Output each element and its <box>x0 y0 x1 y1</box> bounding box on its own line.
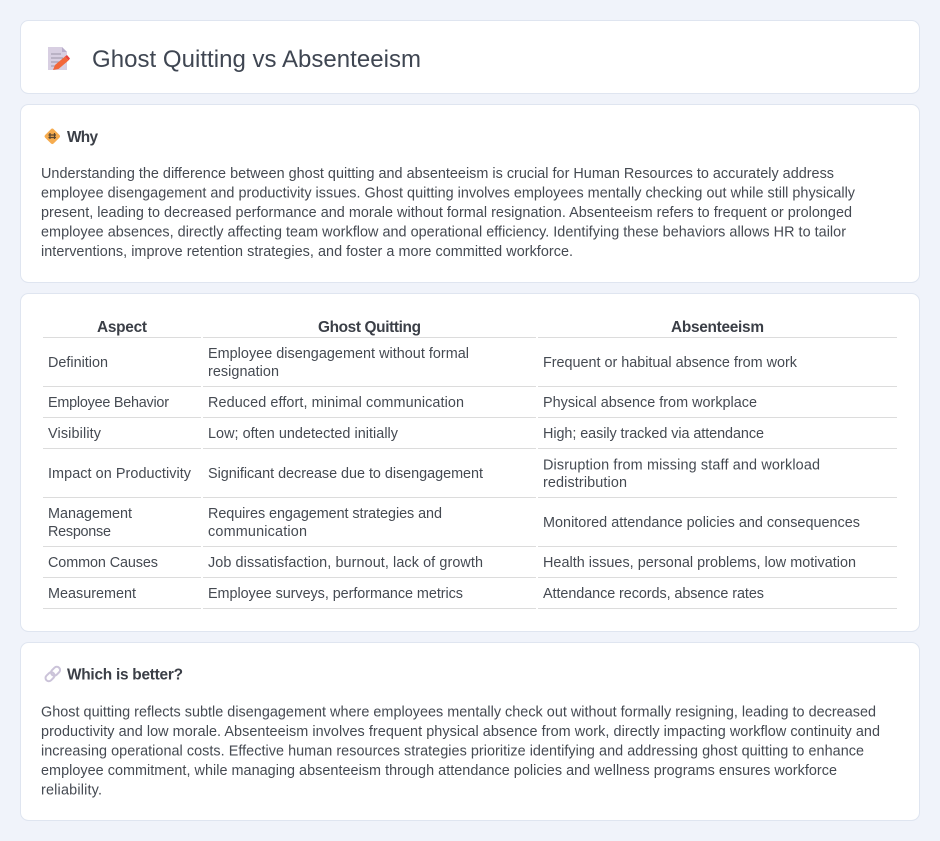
row: management response: Requires engagement strategies and <box>208 506 442 522</box>
row: measurement: Employee surveys, performance metrics <box>208 586 463 602</box>
row: measurement: Attendance records, absence rates <box>543 586 764 602</box>
row: visibility: High; easily tracked via attendance <box>543 426 764 442</box>
row: impact on productivity <box>43 458 897 498</box>
row: visibility: Low; often undetected initially <box>208 426 399 442</box>
row: definition: Frequent or habitual absence from work <box>543 355 798 371</box>
row: employee behavior <box>43 395 897 418</box>
row: common causes: Common Causes <box>48 555 158 571</box>
row: management response: Monitored attendance policies and consequences <box>543 515 860 531</box>
row: measurement: Measurement <box>48 586 136 602</box>
panel: comparison table <box>20 294 920 632</box>
icon: link <box>44 665 61 683</box>
panel: why <box>20 104 920 282</box>
panel: which is better <box>20 642 920 820</box>
table header row: Absenteeism <box>671 319 764 336</box>
row: definition: resignation <box>208 364 279 380</box>
row: impact on productivity: Impact on Productivity <box>48 466 192 482</box>
title: Ghost Quitting vs Absenteeism <box>92 46 421 73</box>
table header row <box>43 319 897 338</box>
row: definition <box>43 346 897 387</box>
text block: why paragraph: interventions, improve retention strategies, and foster a more committed workforce. <box>41 244 573 260</box>
row: common causes: Health issues, personal problems, low motivation <box>543 555 856 571</box>
text block: which is better paragraph: reliability. <box>41 783 102 799</box>
row: impact on productivity: redistribution <box>543 475 627 491</box>
text block: why paragraph: present, leading to decreased performance and morale without formal resignation. Absenteeism refers to frequent or prolonged <box>41 205 852 221</box>
row: impact on productivity: Significant decrease due to disengagement <box>208 466 483 482</box>
row: impact on productivity: Disruption from missing staff and workload <box>543 458 820 474</box>
table header row: Ghost Quitting <box>318 319 421 336</box>
text block: why paragraph: employee disengagement and productivity issues. Ghost quitting involves employees mentally checking out while still physically <box>41 186 856 202</box>
row: employee behavior: Physical absence from workplace <box>543 395 757 411</box>
panel: header <box>20 20 920 94</box>
row: management response: Response <box>48 524 111 540</box>
heading: why: Why <box>67 129 98 146</box>
row: common causes: Job dissatisfaction, burnout, lack of growth <box>208 555 483 571</box>
icon: warning diamond <box>44 128 61 145</box>
text block: why paragraph: Understanding the difference between ghost quitting and absenteeism is crucial for Human Resources to accurately address <box>41 166 834 182</box>
row: visibility <box>43 426 897 449</box>
row: management response <box>43 506 897 547</box>
row: common causes <box>43 555 897 578</box>
text block: why paragraph: employee absences, directly affecting team workflow and operational efficiency. Identifying these behaviors allows HR to tailor <box>41 225 846 241</box>
text block: why paragraph <box>41 166 856 260</box>
row: employee behavior: Reduced effort, minimal communication <box>208 395 464 411</box>
row: measurement <box>43 586 897 609</box>
heading: which is better: Which is better? <box>67 666 183 684</box>
row: definition: Employee disengagement without formal <box>208 346 469 362</box>
text block: which is better paragraph: Ghost quitting reflects subtle disengagement where employees mentally check out without formally resigning, leading to decreased <box>41 705 876 721</box>
row: management response: communication <box>208 524 307 540</box>
text block: which is better paragraph: increasing operational costs. Effective human resources strategies prioritize identifying and addressing ghost quitting to enhance <box>41 744 864 760</box>
table header row: Aspect <box>97 319 147 336</box>
text block: which is better paragraph <box>41 705 880 799</box>
row: visibility: Visibility <box>48 426 102 442</box>
text block: which is better paragraph: employee commitment, while managing absenteeism through attendance policies and wellness programs ensures workforce <box>41 763 837 779</box>
row: management response: Management <box>48 506 132 522</box>
text block: which is better paragraph: productivity and low morale. Absenteeism involves frequent physical absence from work, directly impacting workflow continuity and <box>41 724 880 740</box>
row: definition: Definition <box>48 355 108 371</box>
icon: memo with pencil <box>48 47 70 70</box>
row: employee behavior: Employee Behavior <box>48 395 169 411</box>
